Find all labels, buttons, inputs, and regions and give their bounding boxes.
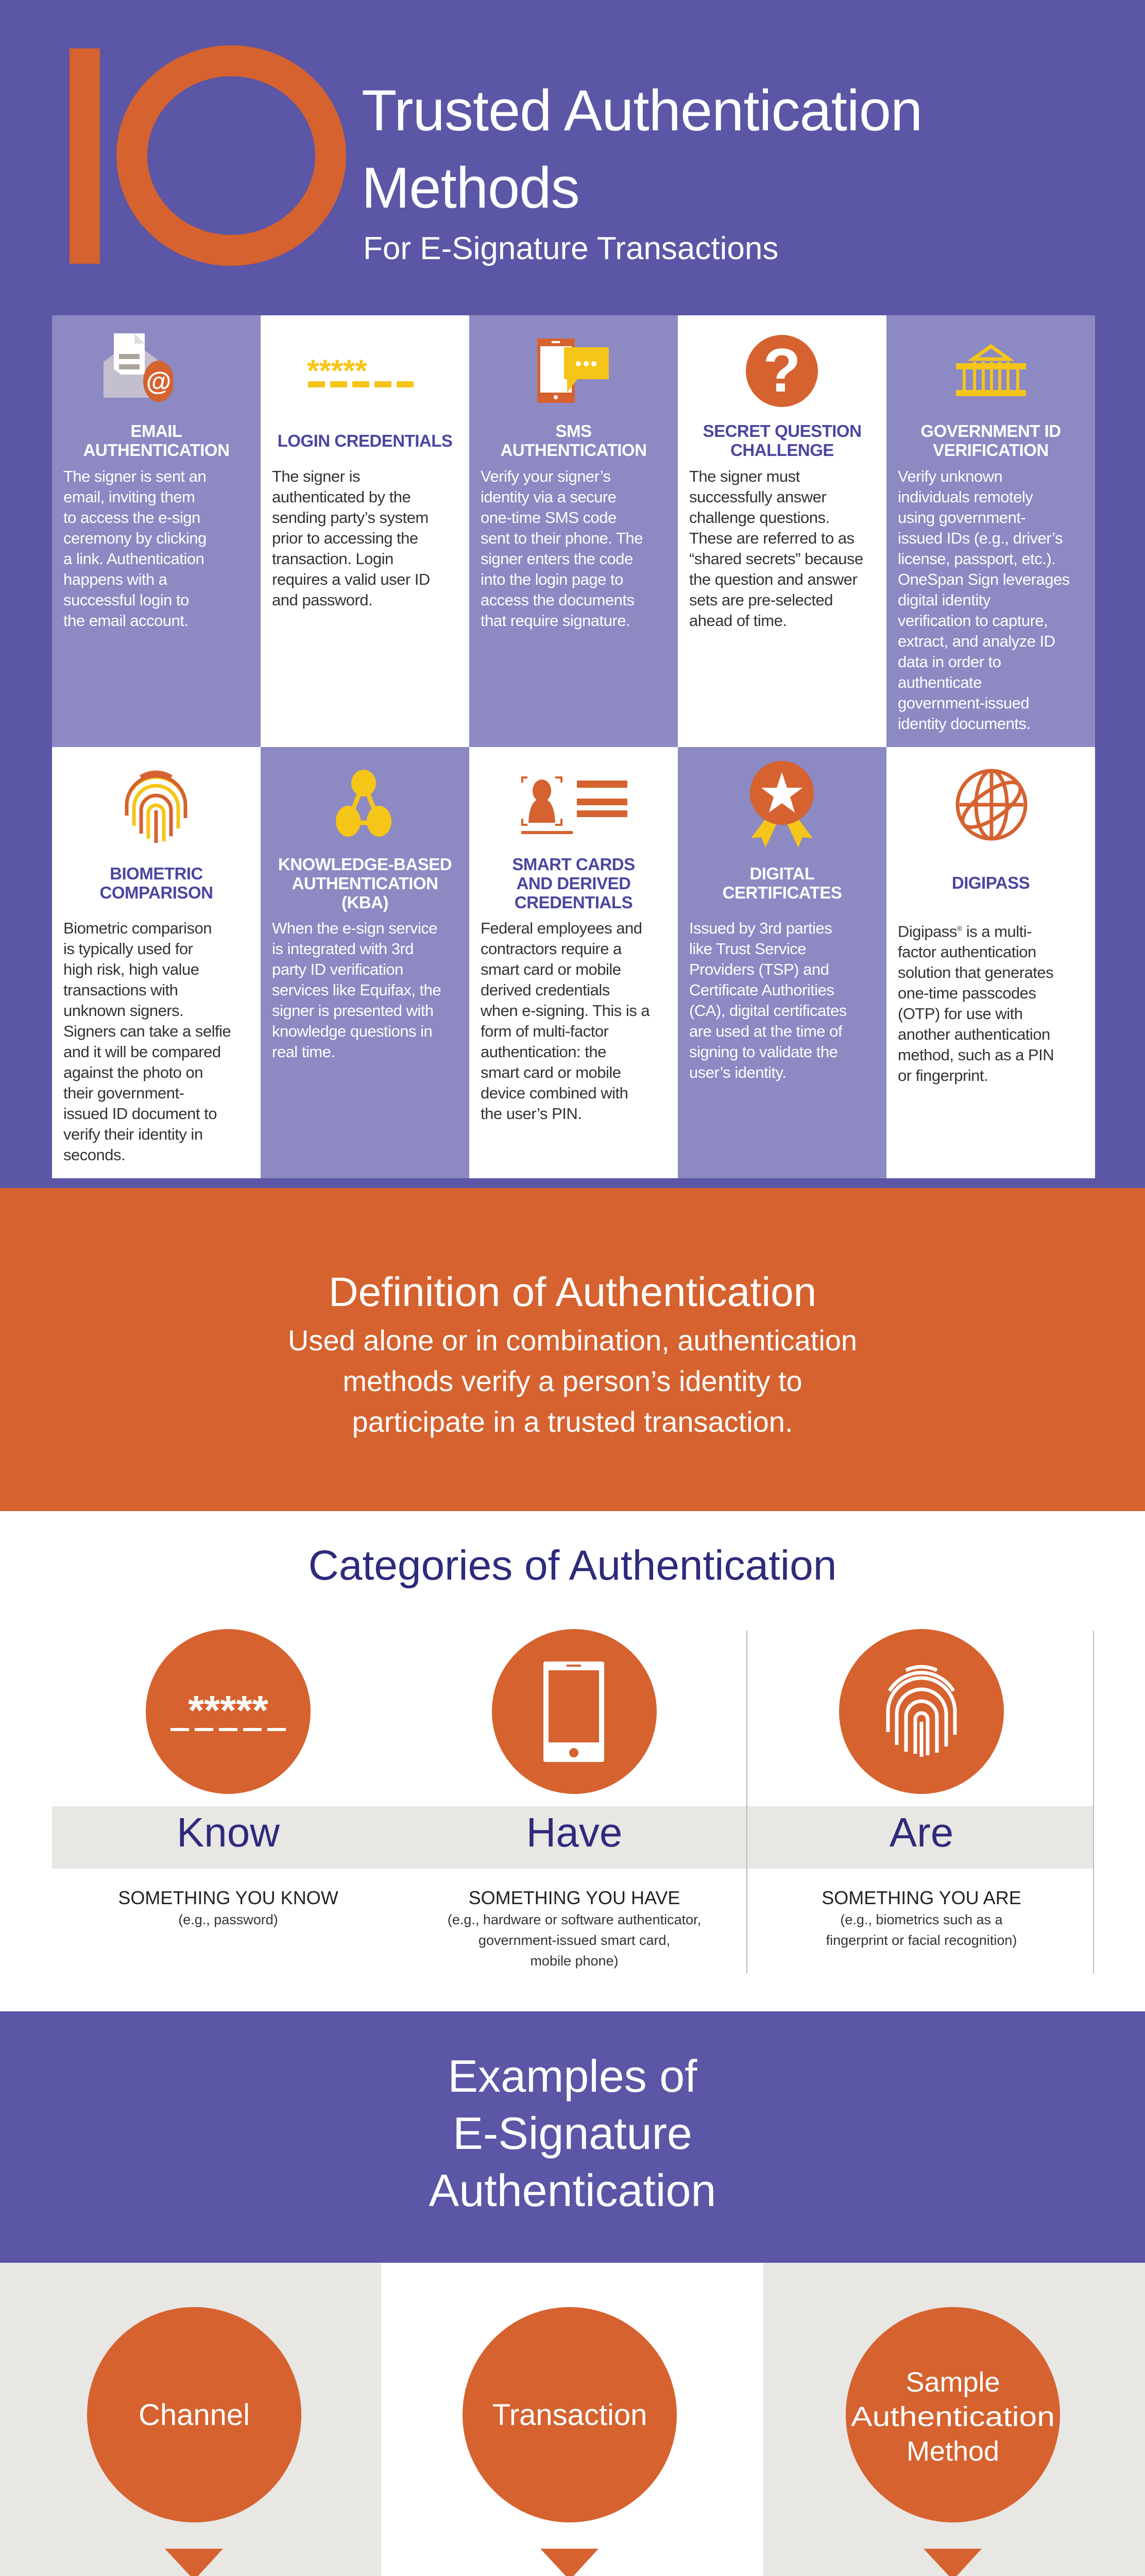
text block: SOMETHING YOU ARE (822, 1887, 1021, 1908)
header: channel (87, 2307, 302, 2576)
panel: biometric comparison (52, 747, 261, 1178)
panel: secret question (678, 315, 886, 747)
header: sample method: Authentication (851, 2401, 1055, 2432)
panel: examples table (0, 2263, 1145, 2576)
text block (481, 467, 643, 630)
text block: (e.g., password) (178, 1912, 278, 1927)
heading (501, 421, 646, 460)
label: Have (526, 1809, 622, 1855)
panel: email authentication (52, 315, 261, 747)
text block: issued IDs (e.g., driver’s (898, 529, 1063, 547)
text block (288, 1324, 857, 1438)
text block: or fingerprint. (898, 1066, 988, 1084)
text block: against the photo on (63, 1063, 203, 1081)
panel: categories (0, 1511, 1145, 2011)
text block: is integrated with 3rd (272, 940, 414, 958)
text block: methods verify a person’s identity to (343, 1365, 802, 1397)
text block: successful login to (63, 591, 189, 609)
heading: SECRET QUESTION (703, 421, 861, 440)
header: sample method (845, 2307, 1061, 2576)
text block: factor authentication (898, 943, 1036, 961)
label: Are (890, 1809, 953, 1855)
text block: government-issued smart card, (478, 1933, 670, 1948)
text block: that require signature. (481, 612, 630, 630)
panel: sms authentication (469, 315, 678, 747)
text block: Used alone or in combination, authentication (288, 1324, 857, 1357)
text block: (e.g., hardware or software authenticator, (448, 1912, 701, 1927)
icon: phone sms (537, 338, 609, 403)
heading: GOVERNMENT ID (920, 421, 1061, 440)
text block: smart card or mobile (481, 1063, 621, 1081)
text block: the question and answer (689, 570, 857, 588)
text block: license, passport, etc.). (898, 550, 1055, 568)
text block: issued ID document to (63, 1105, 217, 1123)
text block: These are referred to as (689, 529, 855, 547)
icon: KBA nodes (336, 770, 391, 837)
text block (898, 467, 1070, 733)
text block: Biometric comparison (63, 919, 212, 937)
text block: The signer is (272, 467, 360, 485)
text block: is typically used for (63, 940, 193, 958)
icon: question (746, 335, 818, 407)
text block (689, 919, 847, 1081)
category: have (448, 1629, 701, 1969)
text block: form of multi-factor (481, 1022, 608, 1040)
text block: Federal employees and (481, 919, 642, 937)
heading: Definition of Authentication (329, 1269, 816, 1315)
text block: Verify your signer’s (481, 467, 610, 485)
text block: and password. (272, 591, 372, 609)
icon: password circle (146, 1629, 311, 1794)
text block: a link. Authentication (63, 550, 204, 568)
heading: AUTHENTICATION (83, 440, 229, 460)
category: are (767, 1629, 1076, 1959)
text block: are used at the time of (689, 1022, 842, 1040)
text block: Providers (TSP) and (689, 960, 829, 978)
text block: high risk, high value (63, 960, 199, 978)
text block: signer is presented with (272, 1002, 434, 1020)
heading: examples: Examples of (448, 2050, 697, 2102)
text block: like Trust Service (689, 940, 806, 958)
panel: government ID (886, 315, 1095, 747)
text block: when e-signing. This is a (481, 1002, 650, 1020)
text block: solution that generates (898, 963, 1053, 981)
icon: smart card (521, 776, 627, 834)
panel: definition (0, 1188, 1145, 1511)
header: sample method: Method (907, 2436, 999, 2467)
text block: device combined with (481, 1084, 628, 1102)
heading (723, 864, 842, 902)
icon: question: ? (763, 336, 801, 405)
heading: DIGIPASS (952, 873, 1030, 892)
panel: digital certificates (678, 747, 886, 1178)
text block: sent to their phone. The (481, 529, 643, 547)
text block: happens with a (63, 570, 167, 588)
heading: examples: E-Signature (453, 2108, 692, 2159)
label: Know (177, 1809, 280, 1855)
text block: successfully answer (689, 488, 826, 506)
text block: access the documents (481, 591, 634, 609)
title (362, 78, 922, 220)
heading: LOGIN CREDENTIALS (278, 431, 452, 450)
text block: Digipass® is a multi- (898, 922, 1032, 940)
text block (272, 919, 441, 1061)
text block: smart card or mobile (481, 960, 621, 978)
text block: verification to capture, (898, 612, 1048, 630)
heading: examples (0, 2047, 1145, 2219)
header: big IO (70, 45, 346, 266)
grey band (52, 1806, 1093, 1869)
text block: SOMETHING YOU HAVE (469, 1887, 680, 1908)
panel: KBA (261, 747, 469, 1178)
text block: “shared secrets” because (689, 550, 863, 568)
text block: Certificate Authorities (689, 981, 834, 999)
heading: CERTIFICATES (723, 883, 842, 902)
heading: AND DERIVED (517, 874, 630, 893)
heading (278, 855, 452, 912)
icon: email: @ (146, 367, 171, 396)
header: transaction: Transaction (492, 2398, 647, 2432)
icon: certificate medal (750, 761, 814, 848)
category: know (118, 1629, 338, 1927)
text block: into the login page to (481, 570, 623, 588)
text block: The signer is sent an (63, 467, 206, 485)
text block: Verify unknown (898, 467, 1002, 485)
text block: sending party’s system (272, 509, 429, 527)
text block (272, 467, 430, 609)
text block: using government- (898, 509, 1026, 527)
text block: transactions with (63, 981, 178, 999)
text block: signing to validate the (689, 1043, 838, 1061)
subtitle: For E-Signature Transactions (363, 231, 778, 266)
text block: government-issued (898, 694, 1029, 712)
text block: Signers can take a selfie (63, 1022, 231, 1040)
text block: another authentication (898, 1025, 1050, 1043)
text block: transaction. Login (272, 550, 394, 568)
heading (512, 855, 635, 912)
text block (63, 467, 207, 630)
title: Trusted Authentication (362, 78, 922, 143)
text block: signer enters the code (481, 550, 633, 568)
text block: (CA), digital certificates (689, 1002, 847, 1020)
heading: CREDENTIALS (515, 893, 633, 912)
text block: ahead of time. (689, 612, 787, 630)
heading: BIOMETRIC (110, 864, 203, 883)
text block (63, 919, 231, 1164)
text block (420, 1887, 729, 1971)
icon: globe (956, 769, 1027, 841)
text block: (OTP) for use with (898, 1005, 1023, 1023)
icon: phone circle (492, 1629, 657, 1794)
text block: OneSpan Sign leverages (898, 570, 1070, 588)
title: Methods (362, 156, 579, 220)
heading: (KBA) (341, 893, 388, 912)
text block (481, 919, 650, 1123)
heading: CHALLENGE (730, 440, 834, 460)
heading: SMS (555, 421, 591, 440)
heading: COMPARISON (100, 883, 213, 902)
text block: identity documents. (898, 715, 1031, 733)
text block: the email account. (63, 612, 189, 630)
icon: password stars (307, 357, 414, 387)
text block: The signer must (689, 467, 800, 485)
text block: identity via a secure (481, 488, 616, 506)
heading: examples: Authentication (429, 2165, 716, 2216)
heading: KNOWLEDGE-BASED (278, 855, 452, 874)
panel: methods grid row 2 (52, 747, 1095, 1178)
text block: party ID verification (272, 960, 403, 978)
text block: challenge questions. (689, 509, 830, 527)
panel: digipass (886, 747, 1095, 1178)
icon: fingerprint circle (839, 1629, 1004, 1794)
text block: authentication: the (481, 1043, 606, 1061)
text block: data in order to (898, 653, 1001, 671)
heading (703, 421, 861, 460)
text block: requires a valid user ID (272, 570, 430, 588)
heading (920, 421, 1061, 460)
heading: DIGITAL (749, 864, 815, 883)
text block: the user’s PIN. (481, 1105, 582, 1123)
text block: one-time SMS code (481, 509, 617, 527)
text block: services like Equifax, the (272, 981, 441, 999)
column backgrounds (0, 2263, 381, 2576)
text block: authenticated by the (272, 488, 411, 506)
panel: login credentials (261, 315, 469, 747)
heading (83, 421, 229, 460)
text block: real time. (272, 1043, 335, 1061)
text block: seconds. (63, 1146, 125, 1164)
text block (118, 1887, 338, 1927)
text block: ceremony by clicking (63, 529, 207, 547)
text block: individuals remotely (898, 488, 1033, 506)
header: sample method: Sample (905, 2367, 1000, 2398)
text block: participate in a trusted transaction. (352, 1405, 793, 1438)
heading (100, 864, 213, 902)
text block (767, 1887, 1076, 1951)
text block: (e.g., biometrics such as a (840, 1912, 1003, 1927)
text block: derived credentials (481, 981, 610, 999)
heading: SMART CARDS (512, 855, 635, 874)
text block: unknown signers. (63, 1002, 183, 1020)
icon: password circle: ***** (188, 1687, 269, 1733)
header: transaction (462, 2307, 677, 2576)
heading: AUTHENTICATION (292, 874, 438, 893)
text block: to access the e-sign (63, 509, 200, 527)
text block: one-time passcodes (898, 984, 1036, 1002)
text block: digital identity (898, 591, 990, 609)
icon: email (104, 333, 173, 402)
text block: fingerprint or facial recognition) (826, 1933, 1017, 1948)
heading: AUTHENTICATION (501, 440, 646, 460)
text block: user’s identity. (689, 1063, 786, 1081)
icon: government building (956, 344, 1026, 396)
text block: and it will be compared (63, 1043, 221, 1061)
icon: fingerprint (125, 771, 187, 843)
text block: their government- (63, 1084, 184, 1102)
text block (898, 922, 1054, 1084)
text block (689, 467, 863, 630)
heading: Categories of Authentication (309, 1542, 836, 1589)
text block: SOMETHING YOU KNOW (118, 1887, 338, 1908)
heading: EMAIL (130, 421, 182, 440)
text block: When the e-sign service (272, 919, 437, 937)
panel: smart cards (469, 747, 678, 1178)
text block: method, such as a PIN (898, 1046, 1054, 1064)
text block: verify their identity in (63, 1125, 203, 1143)
text block: authenticate (898, 673, 982, 691)
text block: knowledge questions in (272, 1022, 432, 1040)
panel: methods grid row 1 (52, 315, 1095, 747)
text block: mobile phone) (530, 1953, 619, 1969)
text block: sets are pre-selected (689, 591, 833, 609)
text block: email, inviting them (63, 488, 195, 506)
heading: VERIFICATION (933, 440, 1049, 460)
text block: Issued by 3rd parties (689, 919, 832, 937)
header: channel: Channel (139, 2398, 250, 2432)
text block: extract, and analyze ID (898, 632, 1055, 650)
text block: contractors require a (481, 940, 622, 958)
text block: prior to accessing the (272, 529, 418, 547)
